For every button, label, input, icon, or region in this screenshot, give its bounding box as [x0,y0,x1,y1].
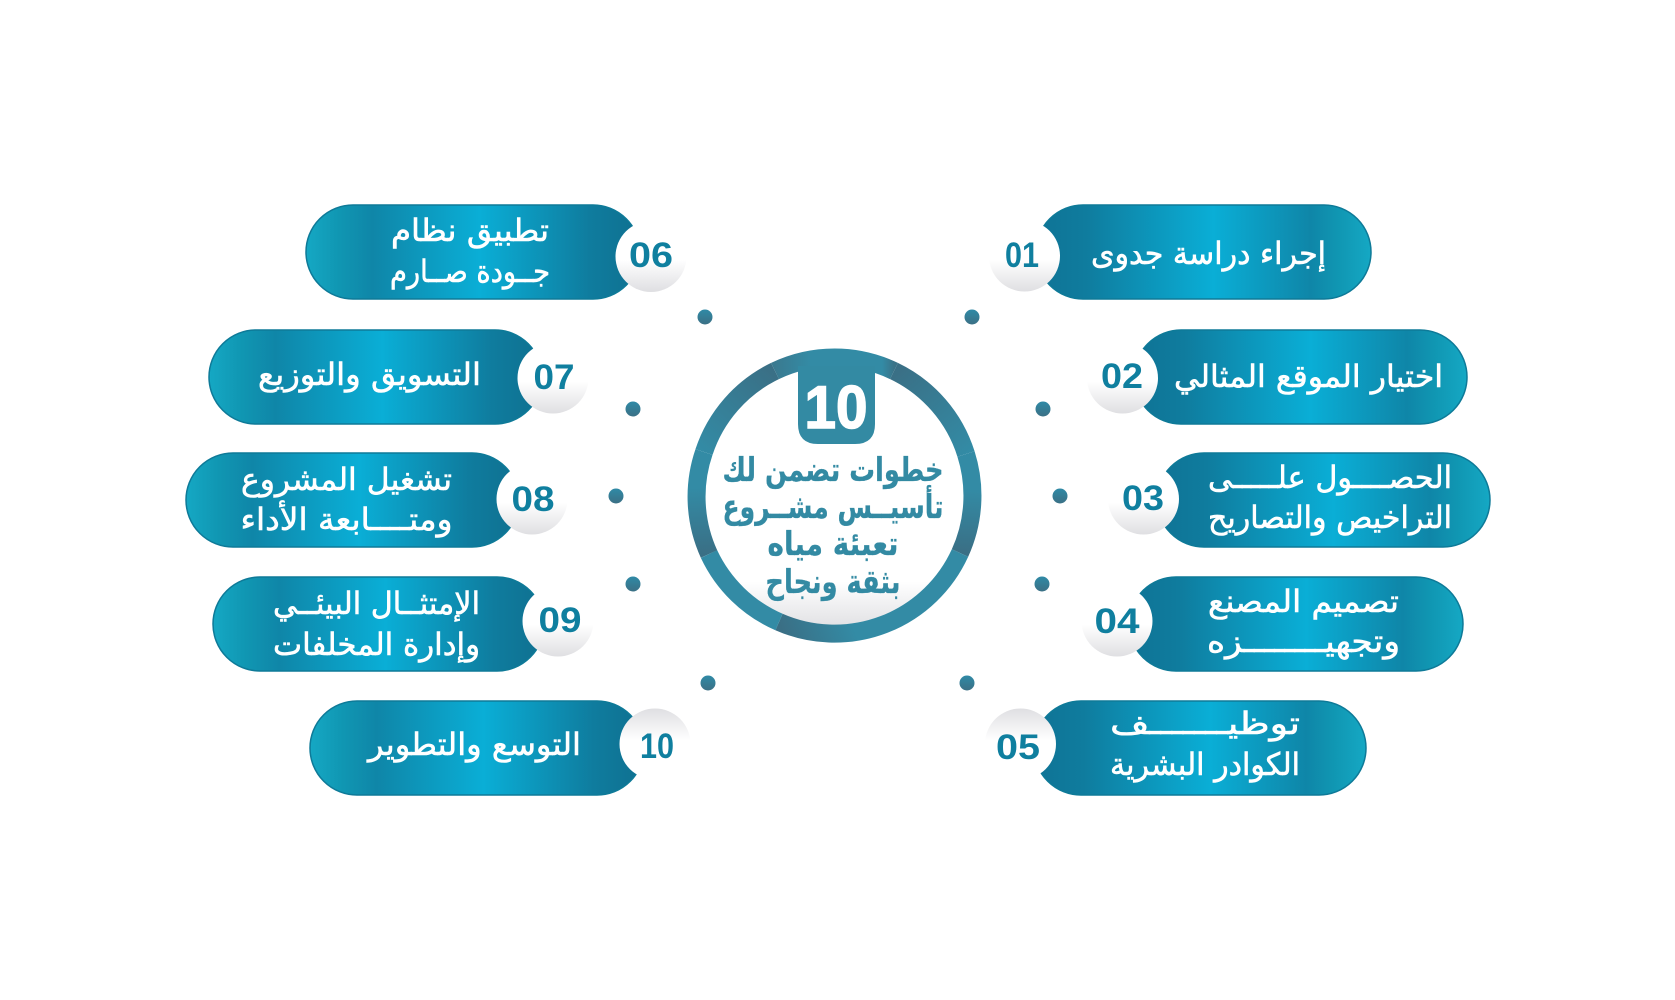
label 09: الإمتثــال البيئــي [273,586,480,622]
badge 05 [985,708,1056,780]
pill 05 [1034,701,1366,795]
central heading: بثقة ونجاح [766,562,900,602]
label 02: اختيار الموقع المثالي [1174,359,1443,395]
badge 04 [1082,586,1152,656]
label 05 [1110,706,1300,783]
number 09: 09 [538,601,582,640]
label 06: تطبيق نظام [391,213,549,249]
badge 07 [518,342,588,414]
badge 02 [1087,342,1158,414]
step 07 [209,330,588,424]
pill 04 [1129,577,1463,671]
label 06 [390,213,550,290]
segmented ring [697,358,972,634]
pill 08 [186,453,519,547]
number 07: 07 [534,358,574,397]
pill 03 [1157,453,1490,547]
label 03: الحصــــول علـــــى [1208,460,1452,496]
step 08 [186,453,568,547]
number 04: 04 [1094,602,1140,641]
pill 09 [213,577,544,671]
label 01: إجراء دراسة جدوى [1091,236,1326,272]
step 06 [306,205,686,299]
step 01 [989,205,1371,299]
number 08: 08 [512,480,554,519]
label 09: وإدارة المخلفات [273,627,480,663]
label 04: تصميم المصنع [1208,584,1399,620]
central heading: تعبئة مياه [768,524,898,563]
number tab [798,366,875,444]
central heading: خطوات تضمن لك [722,450,944,490]
number 03: 03 [1122,479,1164,518]
badge 01 [989,220,1060,292]
step 03 [1108,453,1490,547]
connector dots [608,310,1068,690]
step 02 [1087,330,1467,424]
number 10: 10 [640,727,674,766]
label 09 [273,586,480,663]
badge 09 [522,586,594,656]
central heading: تأسيــس مشــروع [722,485,944,527]
pill 02 [1134,330,1467,424]
badge 10 [620,708,690,780]
badge 03 [1108,464,1179,534]
label 07: التسويق والتوزيع [258,357,481,393]
label 10: التوسع والتطوير [366,727,581,763]
label 04: وتجهيــــــــزه [1207,624,1400,660]
number 02: 02 [1101,357,1143,396]
step 10 [310,701,690,795]
label 05: الكوادر البشرية [1110,747,1300,783]
step 05 [985,701,1366,795]
big number: 10 [804,374,868,441]
label 08: ومتــــابعة الأداء [240,500,452,538]
label 05: توظيـــــــف [1110,706,1300,742]
label 04 [1207,584,1400,660]
step 09 [213,577,594,671]
number 01: 01 [1005,236,1039,275]
pill 06 [306,205,640,299]
label 06: جــودة صــارم [390,254,550,290]
central heading [722,450,944,602]
badge 08 [496,464,568,534]
step 04 [1082,577,1463,671]
number 05: 05 [996,728,1040,767]
label 03: التراخيص والتصاريح [1208,500,1452,536]
central circle [697,358,972,634]
badge 06 [616,221,686,292]
pill 07 [209,330,542,424]
number 06: 06 [629,236,673,275]
pill 01 [1036,205,1371,299]
pill 10 [310,701,644,795]
label 08 [240,462,452,538]
label 03 [1208,460,1452,536]
inner disc [705,366,965,626]
label 08: تشغيل المشروع [241,462,452,498]
